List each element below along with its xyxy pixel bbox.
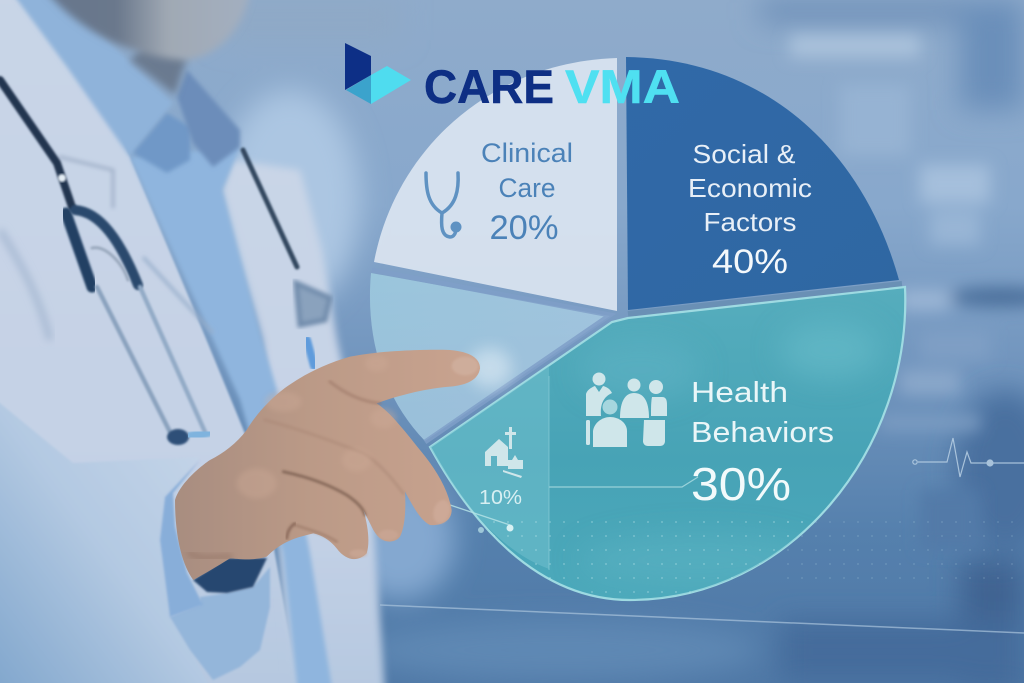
pie texture: mottled glow (608, 328, 870, 596)
shirt left collar (10, 0, 173, 157)
right chest piece (296, 283, 330, 325)
knuckle highlights (237, 355, 397, 498)
pie slice: pale unlabeled segment (370, 273, 610, 441)
health behaviors label: 30% (691, 458, 791, 510)
coat fold shadow (0, 230, 50, 340)
pie slice edge highlight (372, 270, 610, 442)
fingertip glow (468, 348, 512, 388)
coat left panel (0, 0, 300, 683)
hand pointing at chart (175, 350, 480, 580)
U-shaped left arm (66, 213, 92, 287)
blue shirt cuff (160, 460, 203, 617)
pie slice: health behaviors 30% and 10% (430, 287, 905, 600)
pie slice: social and economic factors 40% (626, 57, 899, 310)
U-shaped right arm (75, 210, 138, 285)
lapel shadow (143, 257, 213, 333)
stethoscope (0, 80, 330, 445)
health behaviors label (691, 377, 834, 510)
logo wordmark (424, 60, 680, 113)
pie texture: dot grid (493, 521, 803, 593)
social and economic factors label (688, 139, 812, 281)
dark shirt cuff (193, 558, 267, 593)
logo mark (345, 43, 411, 104)
social and economic factors label: Economic (688, 173, 812, 203)
metal highlight (92, 248, 128, 280)
pie slice: clinical care 20% (374, 58, 617, 311)
coat sleeve (0, 395, 213, 683)
social and economic factors label: 40% (712, 243, 788, 281)
logo wordmark: VMA (565, 60, 680, 113)
clinical care label: Care (498, 173, 556, 203)
ecg line (913, 438, 1024, 477)
pie separator between social and teal (628, 284, 902, 314)
logo (345, 43, 680, 113)
health behaviors label: Health (691, 377, 788, 409)
icon: community building (485, 427, 523, 478)
clinical care label (481, 138, 573, 247)
right tube (243, 150, 297, 267)
neck tube (0, 80, 72, 207)
coat sleeve inner (170, 567, 270, 680)
lower chest piece (167, 429, 189, 445)
10 percent label: 10% (479, 487, 522, 509)
background dot texture (780, 520, 1024, 590)
beard (45, 0, 250, 60)
health behaviors label: Behaviors (691, 417, 834, 449)
social and economic factors label: Social & (692, 139, 796, 169)
chart guide lines (450, 376, 698, 570)
fingernails (452, 357, 478, 375)
icon: stethoscope (426, 173, 460, 237)
neck (130, 40, 187, 95)
pie texture: lighter left band (430, 366, 549, 569)
logo wordmark: CARE (424, 60, 554, 113)
thin inner tube (60, 157, 113, 207)
blue tag (307, 340, 314, 366)
icon: group of people (586, 372, 667, 447)
shirt body (130, 147, 333, 683)
hand shading (190, 382, 403, 557)
bottom accent line (380, 605, 1024, 633)
shirt centre collar (133, 113, 190, 173)
clinical care label: Clinical (481, 138, 573, 168)
doctor in white coat (0, 0, 385, 683)
shirt right collar (177, 70, 240, 167)
lower tubes (97, 287, 170, 432)
coat right panel (222, 160, 385, 683)
social and economic factors label: Factors (704, 207, 796, 237)
clinical care label: 20% (490, 209, 558, 247)
